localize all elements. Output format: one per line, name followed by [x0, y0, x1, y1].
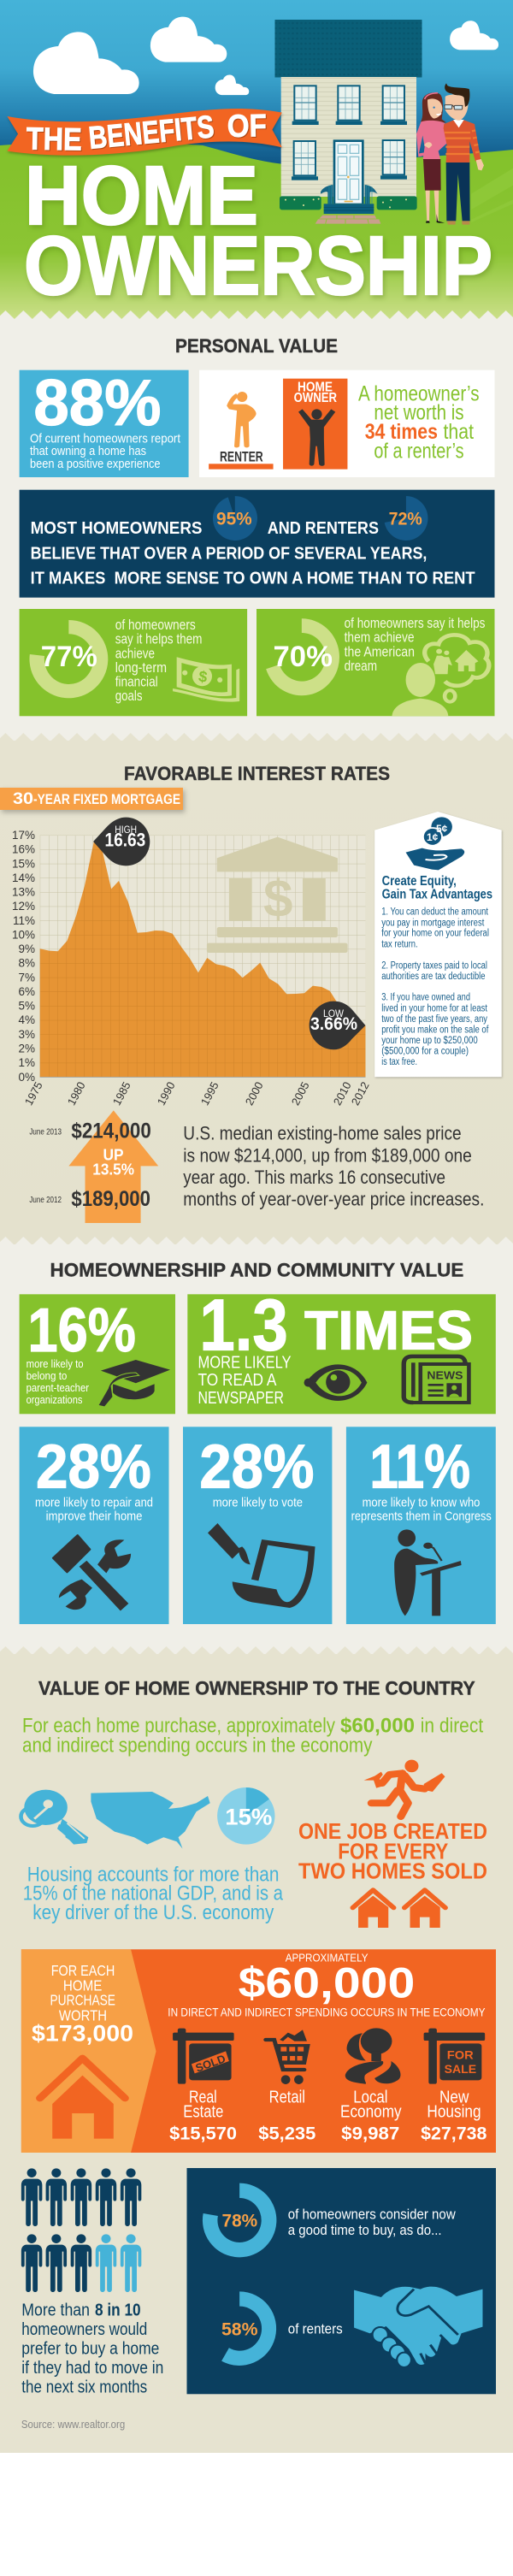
icon: hand with coins: 5¢ — [436, 823, 448, 835]
chart: price up arrow — [29, 1110, 158, 1223]
icon: runner with tools — [364, 1760, 445, 1817]
section: header — [0, 0, 513, 321]
panel: 1.3 times newspaper: TO READ A — [198, 1371, 277, 1390]
panel: 16% parent-teacher: belong to — [27, 1369, 67, 1382]
text: tax advantages list — [381, 907, 489, 1067]
text: net worth 34 times: 34 times — [365, 420, 438, 444]
chart: price up arrow: June 2012 — [29, 1195, 62, 1205]
axis: x year labels: 2010 — [331, 1079, 354, 1108]
icon: home owner — [283, 379, 347, 470]
text: own vs rent statement: 95% — [216, 509, 252, 529]
axis: y percent labels: 7% — [18, 971, 35, 984]
stat: 78%: 78% — [222, 2211, 258, 2230]
panel: $173,000 purchase: WORTH — [59, 2006, 107, 2024]
illustration: couple — [416, 83, 484, 225]
text: of renters: of renters — [288, 2321, 343, 2337]
text: american dream: the American — [345, 644, 415, 659]
panel: 28% vote: 28% — [199, 1433, 314, 1501]
label: renter: RENTER — [220, 448, 263, 464]
text: financial goals: goals — [115, 688, 142, 704]
text: tax advantages list: your home up to $250,000 — [381, 1036, 478, 1046]
axis: x year labels: 1990 — [155, 1079, 178, 1108]
axis: x year labels: 2012 — [349, 1079, 372, 1108]
panel: 1.3 times newspaper — [187, 1285, 496, 1414]
panel: $60,000 breakdown — [21, 1949, 496, 2153]
chart: price up arrow: 13.5% — [92, 1161, 134, 1178]
heading: create equity: Create Equity, — [382, 874, 457, 889]
icon: usa map — [91, 1792, 210, 1849]
callout: low 3.66%: 3.66% — [310, 1014, 357, 1034]
item: retail: $5,235 — [258, 2124, 316, 2144]
stat: 77%: 77% — [41, 641, 97, 673]
panel: own vs rent — [20, 490, 495, 598]
text: one job created for every two homes sold: ONE JOB CREATED — [298, 1818, 487, 1844]
text: more than 8 in 10: the next six months — [21, 2378, 147, 2397]
panel: 28% repair — [20, 1427, 168, 1624]
axis: y percent labels: 8% — [18, 957, 35, 970]
text: more than 8 in 10: 8 in 10 — [95, 2300, 141, 2319]
panel: 16% parent-teacher: more likely to — [27, 1357, 84, 1370]
title: home: HOME — [25, 149, 258, 242]
text: one job created for every two homes sold: FOR EVERY — [338, 1838, 448, 1864]
axis: x year labels — [22, 1079, 372, 1108]
panel: 1.3 times newspaper: MORE LIKELY — [198, 1353, 292, 1372]
axis: x year labels: 1980 — [65, 1079, 88, 1108]
panel: 28% repair: more likely to repair and — [35, 1496, 153, 1510]
source line: Source: www.realtor.org — [21, 2418, 125, 2431]
panel: $173,000 purchase: PURCHASE — [50, 1992, 115, 2009]
panel: $173,000 purchase — [21, 1949, 156, 2153]
icon: clouds — [33, 17, 498, 95]
text: more than 8 in 10: prefer to buy a home — [21, 2339, 159, 2359]
text: tax advantages list: 1. You can deduct the amount — [381, 907, 489, 918]
axis: y percent labels: 1% — [18, 1056, 35, 1069]
icon group: 8 in 10 people — [21, 2168, 141, 2292]
axis: y percent labels: 9% — [18, 942, 35, 955]
panel: 70% american dream — [256, 609, 494, 716]
panel: 28% repair: 28% — [36, 1433, 151, 1501]
text: own vs rent statement: 72% — [389, 509, 422, 529]
item: real estate: SOLD — [194, 2052, 227, 2075]
heading: create equity: Gain Tax Advantages — [382, 888, 492, 902]
text: own vs rent statement: IT MAKES MORE SENSE TO OWN A HOME THAN TO RENT — [31, 569, 475, 588]
axis: x year labels: 2000 — [243, 1079, 266, 1108]
chart: donut 78% — [203, 2183, 276, 2257]
text: $60,000 spending — [22, 1715, 483, 1757]
stat: 58%: 58% — [221, 2320, 258, 2340]
chart: price up arrow: UP — [103, 1147, 124, 1164]
text: tax advantages list: is tax free. — [381, 1057, 417, 1067]
section: homeownership and community value — [20, 1260, 496, 1624]
item: local economy: Local — [353, 2088, 388, 2106]
banner: the benefits of: THE — [26, 121, 82, 157]
panel: 16% parent-teacher: parent-teacher — [27, 1381, 90, 1394]
panel: 28% repair: improve their home — [46, 1509, 142, 1523]
axis: x year labels: 1995 — [198, 1079, 221, 1108]
text: tax advantages list: authorities are tax deductible — [381, 972, 486, 982]
icon: handshake — [354, 2287, 482, 2367]
panel: 88%: 88% — [33, 367, 161, 440]
item: real estate: Real — [189, 2088, 217, 2106]
text: tax advantages list: 3. If you have owned and — [381, 993, 470, 1003]
icon: speaker at podium — [394, 1529, 462, 1616]
chart: price up arrow: $189,000 — [71, 1187, 150, 1211]
panel: 1.3 times newspaper: NEWSPAPER — [198, 1389, 284, 1408]
panel: 88%: been a positive experience — [30, 458, 161, 471]
chart: 30-year fixed mortgage rate: $ — [263, 870, 292, 929]
panel: 11% congress: 11% — [369, 1433, 470, 1501]
text: of homeowners: a good time to buy, as do... — [288, 2222, 442, 2238]
icon: newspaper — [404, 1356, 469, 1403]
text: tax advantages list: for your home on your federal — [381, 929, 489, 939]
chart: price up arrow: $214,000 — [71, 1120, 151, 1143]
text: housing accounts for GDP: 15% of the national GDP, and is a — [23, 1882, 284, 1905]
banner: the benefits of: OF — [227, 108, 267, 144]
chart: 30-year fixed mortgage rate — [12, 818, 372, 1108]
item: new housing: Housing — [427, 2103, 481, 2122]
text: own vs rent statement — [31, 509, 475, 588]
text: $60,000 spending: For each home purchase, approximately — [22, 1715, 335, 1738]
section: favorable interest rates — [0, 763, 502, 1223]
panel: 1.3 times newspaper: TIMES — [304, 1300, 473, 1362]
panel: create equity, gain tax advantages — [374, 812, 502, 1077]
item: local economy: Economy — [340, 2103, 402, 2122]
chart: price up arrow: June 2013 — [29, 1127, 62, 1137]
text: tax advantages list: lived in your home for at least — [381, 1003, 488, 1013]
axis: y percent labels: 6% — [18, 985, 35, 998]
axis: y percent labels — [12, 829, 35, 1084]
panel: 28% vote: more likely to vote — [213, 1496, 303, 1510]
text: financial goals: long-term — [115, 660, 167, 676]
label: home owner: OWNER — [294, 391, 337, 405]
text: net worth 34 times: net worth is — [374, 401, 464, 425]
icon: money: $ — [198, 668, 209, 686]
text: median home sales price: U.S. median existing-home sales price — [183, 1123, 462, 1144]
callout: low 3.66% — [310, 1001, 365, 1049]
icon: ballot and pen — [208, 1523, 315, 1608]
heading: personal value: PERSONAL VALUE — [175, 335, 338, 357]
text: american dream: of homeowners say it helps — [345, 616, 486, 631]
text: tax advantages list: ($500,000 for a couple) — [381, 1046, 469, 1056]
text: tax advantages list: tax return. — [381, 939, 418, 949]
text: housing accounts for GDP: key driver of the U.S. economy — [32, 1901, 274, 1924]
text: of homeowners — [288, 2206, 456, 2238]
panel: 11% congress: more likely to know who — [363, 1496, 480, 1510]
text: american dream — [345, 616, 486, 674]
panel: 77% financial goals — [20, 609, 247, 716]
panel: 28% vote — [183, 1427, 332, 1624]
panel: 16% parent-teacher — [20, 1294, 175, 1414]
label: 30-year fixed mortgage: 30 — [13, 790, 33, 808]
text: of homeowners: of homeowners consider now — [288, 2206, 456, 2222]
item: retail: Retail — [269, 2088, 305, 2106]
axis: y percent labels: 15% — [12, 857, 35, 870]
item: new housing: $27,738 — [421, 2124, 487, 2144]
panel: 88% — [20, 367, 189, 477]
text: net worth 34 times: of a renter’s — [374, 440, 464, 464]
heading: favorable interest rates: FAVORABLE INTEREST RATES — [124, 763, 390, 784]
text: approximately $60,000 — [168, 1952, 486, 2019]
axis: y percent labels: 16% — [12, 843, 35, 856]
icon: newspaper: NEWS — [427, 1369, 463, 1382]
chart: pie 15%: 15% — [225, 1804, 272, 1829]
item: new housing: FOR — [447, 2048, 474, 2062]
panel: 11% congress: represents them in Congress — [351, 1509, 492, 1523]
axis: x year labels: 1975 — [22, 1079, 45, 1108]
text: own vs rent statement: MOST HOMEOWNERS — [31, 519, 202, 538]
text: own vs rent statement: BELIEVE THAT OVER A PERIOD OF SEVERAL YEARS, — [31, 544, 427, 563]
panel: 88%: Of current homeowners report — [30, 432, 180, 446]
text: one job created for every two homes sold: TWO HOMES SOLD — [298, 1858, 487, 1884]
stat: 70%: 70% — [274, 641, 333, 673]
text: own vs rent statement: AND RENTERS — [268, 519, 379, 538]
chart: donut 70% — [266, 618, 339, 695]
text: median home sales price — [183, 1123, 484, 1209]
section: personal value — [20, 335, 495, 716]
item: local economy: $9,987 — [341, 2124, 399, 2144]
axis: y percent labels: 11% — [13, 914, 35, 927]
axis: y percent labels: 5% — [18, 1000, 35, 1013]
text: financial goals — [115, 617, 202, 704]
text: approximately $60,000: APPROXIMATELY — [286, 1952, 369, 1964]
text: more than 8 in 10: More than — [21, 2300, 90, 2319]
icon: hand with coins: 1¢ — [427, 831, 439, 843]
item: real estate — [169, 2029, 237, 2144]
callout: high 16.63: HIGH — [115, 824, 137, 836]
icon: graduation cap — [98, 1360, 170, 1407]
text: financial goals: say it helps them — [115, 632, 202, 647]
panel: net worth — [199, 370, 494, 477]
text: housing accounts for GDP — [23, 1863, 284, 1924]
text: approximately $60,000: $60,000 — [239, 1959, 415, 2007]
text: median home sales price: is now $214,000, up from $189,000 one — [183, 1144, 472, 1166]
axis: y percent labels: 2% — [18, 1042, 35, 1055]
axis: y percent labels: 12% — [12, 900, 35, 913]
icon: person dreaming of home and family — [392, 635, 489, 716]
text: net worth 34 times: that — [443, 420, 474, 444]
text: tax advantages list: 2. Property taxes paid to local — [381, 960, 487, 971]
text: more than 8 in 10 — [21, 2300, 163, 2397]
item: new housing: SALE — [445, 2062, 476, 2076]
item: real estate: $15,570 — [169, 2124, 237, 2144]
item: retail — [258, 2029, 316, 2144]
chart: donut 58% — [221, 2291, 276, 2366]
heading: homeownership and community value: HOMEOWNERSHIP AND COMMUNITY VALUE — [50, 1260, 463, 1281]
text: housing accounts for GDP: Housing accounts for more than — [27, 1863, 279, 1886]
icon: hand with coins — [406, 817, 464, 870]
label: home owner — [294, 380, 337, 405]
chart: pie 15% — [217, 1787, 274, 1845]
heading: value to the country: VALUE OF HOME OWNERSHIP TO THE COUNTRY — [38, 1678, 475, 1699]
text: more than 8 in 10: if they had to move in — [21, 2358, 163, 2378]
text: financial goals: financial — [115, 675, 158, 690]
chart: pie 72% — [385, 496, 428, 541]
callout: high 16.63 — [93, 818, 150, 866]
panel: $173,000 purchase: HOME — [63, 1976, 102, 1994]
text: net worth 34 times: A homeowner’s — [358, 381, 480, 405]
text: median home sales price: year ago. This marks 16 consecutive — [183, 1167, 445, 1188]
callout: high 16.63: 16.63 — [104, 829, 145, 850]
axis: y percent labels: 14% — [12, 871, 35, 884]
heading: create equity — [382, 874, 492, 902]
icon: key — [21, 1790, 88, 1845]
text: net worth 34 times — [358, 381, 480, 464]
illustration: house — [275, 20, 422, 224]
text: one job created for every two homes sold — [298, 1818, 487, 1884]
axis: x year labels: 2005 — [289, 1079, 312, 1108]
panel: 11% congress — [346, 1427, 496, 1624]
axis: y percent labels: 17% — [12, 829, 35, 842]
axis: y percent labels: 3% — [18, 1028, 35, 1041]
icon: money — [173, 657, 239, 702]
item: real estate: Estate — [183, 2103, 223, 2122]
item: local economy — [340, 2028, 402, 2144]
chart: pie 95% — [213, 496, 257, 541]
icon: hammer and wrench — [53, 1535, 131, 1612]
banner: the benefits of — [7, 108, 282, 157]
axis: y percent labels: 10% — [12, 928, 35, 941]
text: tax advantages list: you pay in mortgage interest — [381, 918, 485, 928]
text: american dream: them achieve — [345, 630, 414, 646]
text: financial goals: achieve — [115, 646, 155, 661]
item: new housing: New — [439, 2088, 469, 2106]
item: new housing — [421, 2029, 487, 2144]
panel: 1.3 times newspaper: 1.3 — [199, 1285, 288, 1366]
label: 30-year fixed mortgage — [0, 788, 183, 810]
axis: y percent labels: 13% — [12, 886, 35, 898]
text: $60,000 spending: $60,000 — [340, 1715, 415, 1738]
axis: y percent labels: 4% — [18, 1013, 35, 1026]
panel: 16% parent-teacher: organizations — [27, 1393, 83, 1406]
icon: eye — [304, 1364, 367, 1401]
green hills — [0, 142, 513, 321]
callout: low 3.66%: LOW — [323, 1007, 345, 1019]
label: home owner: HOME — [298, 380, 333, 394]
text: tax advantages list: two of the past five years, any — [381, 1014, 487, 1025]
axis: y percent labels: 0% — [18, 1071, 35, 1084]
panel: $173,000 purchase: FOR EACH — [51, 1962, 115, 1979]
panel: $173,000 purchase: $173,000 — [32, 2021, 133, 2047]
text: american dream: dream — [345, 659, 377, 674]
axis: x year labels: 1985 — [110, 1079, 133, 1108]
panel: 88%: that owning a home has — [30, 445, 146, 458]
icon: house — [40, 2059, 125, 2139]
text: $60,000 spending: in direct — [421, 1715, 483, 1738]
panel: good time to buy — [186, 2168, 496, 2394]
icon: renter — [209, 392, 274, 470]
text: tax advantages list: profit you make on the sale of — [381, 1025, 489, 1035]
icon: two houses — [353, 1890, 445, 1928]
label: 30-year fixed mortgage: -YEAR FIXED MORTGAGE — [33, 792, 180, 807]
text: financial goals: of homeowners — [115, 617, 196, 633]
panel: 16% parent-teacher: 16% — [27, 1297, 136, 1365]
text: $60,000 spending: and indirect spending occurs in the economy — [22, 1734, 373, 1757]
chart: donut 77% — [29, 620, 108, 698]
section: value of home ownership to the country — [21, 1678, 496, 2431]
text: more than 8 in 10: homeowners would — [21, 2319, 147, 2339]
banner: the benefits of: BENEFITS — [87, 109, 215, 156]
